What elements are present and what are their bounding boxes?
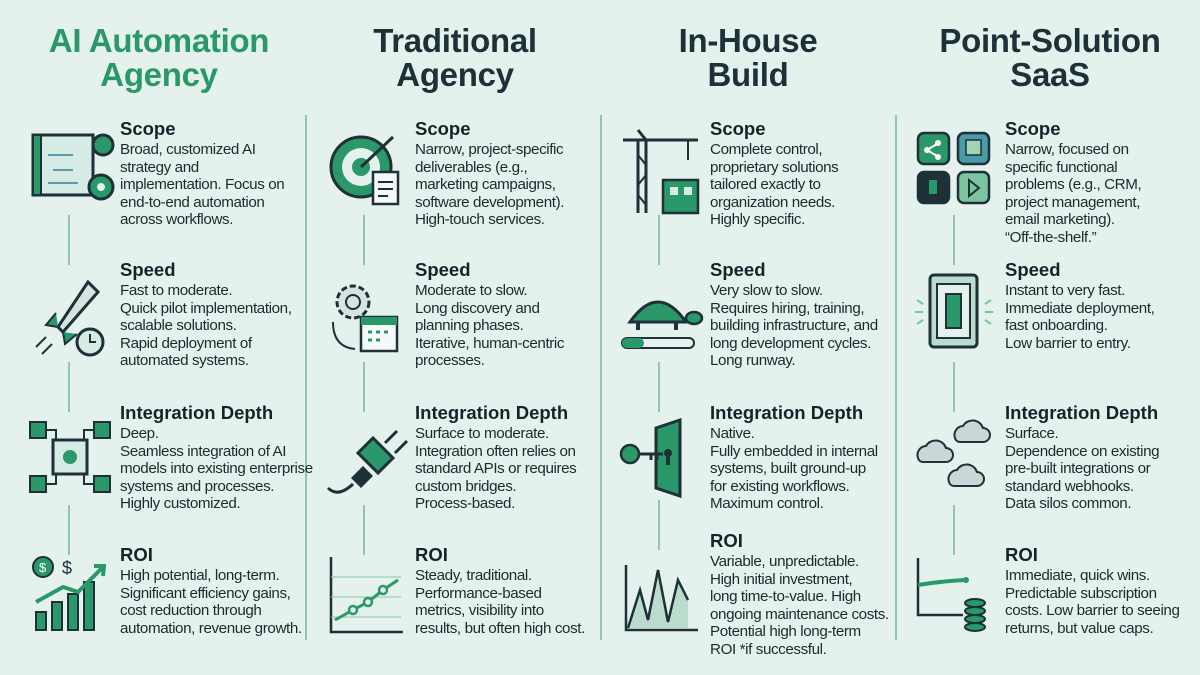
icon: blueprint with gears	[32, 134, 114, 200]
text: In-house integration: Maximum control.	[710, 495, 823, 512]
text: SaaS scope	[1005, 118, 1141, 246]
text: Traditional ROI: metrics, visibility into	[415, 602, 544, 619]
text: SaaS speed	[1005, 259, 1154, 352]
text: Traditional scope: software development).	[415, 194, 564, 210]
text: SaaS speed: Low barrier to entry.	[1005, 334, 1131, 352]
text: In-house speed: Very slow to slow.	[710, 282, 823, 299]
text: Traditional ROI: Steady, traditional.	[415, 567, 532, 584]
text: AI scope: Scope	[120, 118, 176, 139]
text: AI integration: Deep.	[120, 425, 159, 442]
text: Traditional scope: Scope	[415, 118, 471, 139]
icon: volatile chart	[624, 565, 698, 632]
text: Traditional scope: deliverables (e.g.,	[415, 158, 527, 176]
title: In-House Build	[679, 22, 817, 93]
text: AI scope: implementation. Focus on	[120, 176, 284, 193]
text: In-house scope: Complete control,	[710, 141, 822, 158]
text: SaaS speed: Speed	[1005, 259, 1061, 280]
text: Traditional speed: Long discovery and	[415, 300, 540, 316]
text: SaaS speed: Immediate deployment,	[1005, 300, 1154, 316]
text: In-house speed: building infrastructure, and	[710, 317, 878, 334]
text: Traditional scope	[415, 118, 564, 228]
text: Traditional scope: marketing campaigns,	[415, 176, 556, 193]
text: Traditional speed	[415, 259, 564, 369]
text: SaaS scope: email marketing).	[1005, 211, 1115, 228]
text: AI scope: across workflows.	[120, 211, 233, 228]
title: Traditional Agency: Agency	[396, 56, 514, 93]
text: SaaS ROI: returns, but value caps.	[1005, 620, 1153, 636]
text: SaaS scope: specific functional	[1005, 158, 1117, 176]
text: AI speed: automated systems.	[120, 352, 249, 369]
text: AI speed: Fast to moderate.	[120, 282, 232, 299]
icon: target with document	[330, 136, 400, 206]
text: In-house integration: Integration Depth	[710, 402, 863, 423]
text: In-house ROI	[710, 530, 889, 658]
icon: turtle with progress bar	[621, 300, 704, 349]
text: SaaS scope: Scope	[1005, 118, 1061, 139]
text: AI scope: Broad, customized AI	[120, 141, 256, 158]
text: In-house scope: organization needs.	[710, 194, 835, 210]
icon: growth chart with coins: $	[62, 558, 72, 578]
text: Traditional integration: Surface to moderate.	[415, 425, 549, 442]
text: Traditional scope: High-touch services.	[415, 211, 545, 228]
icon: flat line with coins	[916, 558, 986, 632]
text: AI ROI: cost reduction through	[120, 602, 261, 619]
text: AI scope: end-to-end automation	[120, 194, 264, 210]
text: AI speed: Rapid deployment of	[120, 334, 252, 352]
text: In-house ROI: ROI	[710, 530, 743, 551]
text: SaaS scope: Narrow, focused on	[1005, 141, 1129, 158]
text: SaaS integration: pre-built integrations or	[1005, 460, 1150, 477]
text: SaaS speed: fast onboarding.	[1005, 317, 1108, 334]
text: In-house integration: Native.	[710, 425, 754, 442]
text: In-house scope: tailored exactly to	[710, 176, 821, 193]
text: SaaS integration: standard webhooks.	[1005, 478, 1134, 494]
text: SaaS ROI: ROI	[1005, 544, 1038, 565]
title: In-House Build: In-House	[679, 22, 817, 59]
text: In-house ROI: ROI *if successful.	[710, 640, 826, 658]
text: AI ROI: automation, revenue growth.	[120, 620, 302, 636]
text: In-house scope: Scope	[710, 118, 766, 139]
text: AI speed: Speed	[120, 259, 176, 280]
title: Point-Solution SaaS: SaaS	[1010, 56, 1090, 93]
text: SaaS speed: Instant to very fast.	[1005, 282, 1125, 299]
text: SaaS scope: project management,	[1005, 194, 1140, 210]
text: In-house speed	[710, 259, 878, 369]
text: Traditional ROI: results, but often high cost.	[415, 620, 585, 636]
icon: growth chart with coins	[32, 556, 106, 631]
title: AI Automation Agency	[49, 22, 269, 93]
title: In-House Build: Build	[708, 56, 788, 93]
text: AI integration: systems and processes.	[120, 478, 274, 494]
text: In-house ROI: High initial investment,	[710, 570, 852, 588]
text: AI ROI: High potential, long-term.	[120, 567, 279, 584]
text: SaaS scope: problems (e.g., CRM,	[1005, 176, 1141, 193]
text: Traditional speed: Speed	[415, 259, 471, 280]
text: In-house speed: Speed	[710, 259, 766, 280]
icon: gear with calendar	[332, 284, 398, 352]
text: SaaS integration: Integration Depth	[1005, 402, 1158, 423]
title: AI Automation Agency: AI Automation	[49, 22, 269, 59]
icon: growth chart with coins: $	[39, 560, 47, 575]
text: Traditional speed: planning phases.	[415, 317, 523, 334]
text: In-house ROI: Potential high long-term	[710, 623, 861, 640]
text: SaaS integration	[1005, 402, 1159, 512]
text: Traditional integration: Integration Depth	[415, 402, 568, 423]
title: Point-Solution SaaS: Point-Solution	[939, 22, 1161, 59]
text: SaaS scope: “Off-the-shelf.”	[1005, 228, 1096, 246]
title: Traditional Agency: Traditional	[373, 22, 537, 59]
text: SaaS ROI: costs. Low barrier to seeing	[1005, 602, 1180, 619]
text: Traditional scope: Narrow, project-specific	[415, 141, 563, 158]
text: AI scope	[120, 118, 284, 228]
icon: steady line chart	[330, 557, 403, 634]
text: AI integration	[120, 402, 313, 512]
text: In-house integration: for existing workflows.	[710, 478, 849, 494]
text: AI integration: Seamless integration of AI	[120, 442, 286, 460]
icon: plug	[327, 430, 408, 494]
text: AI speed: scalable solutions.	[120, 317, 237, 334]
text: SaaS integration: Dependence on existing	[1005, 442, 1159, 460]
text: Traditional speed: Moderate to slow.	[415, 282, 527, 299]
icon: crane with building	[623, 129, 700, 214]
text: In-house scope: Highly specific.	[710, 211, 805, 228]
text: In-house integration: systems, built ground-up	[710, 460, 866, 477]
text: AI ROI	[120, 544, 302, 636]
icon: chip	[29, 421, 111, 493]
text: In-house ROI: Variable, unpredictable.	[710, 553, 859, 570]
text: AI ROI: ROI	[120, 544, 153, 565]
text: SaaS integration: Data silos common.	[1005, 495, 1131, 512]
text: In-house ROI: ongoing maintenance costs.	[710, 606, 889, 622]
text: AI integration: Integration Depth	[120, 402, 273, 423]
text: AI ROI: Significant efficiency gains,	[120, 584, 290, 602]
icon: switch	[915, 274, 993, 348]
text: Traditional integration: Integration often relies on	[415, 442, 576, 460]
text: SaaS ROI: Immediate, quick wins.	[1005, 567, 1150, 584]
text: In-house scope: proprietary solutions	[710, 158, 838, 176]
text: Traditional ROI: Performance-based	[415, 584, 542, 602]
text: In-house scope	[710, 118, 838, 228]
text: In-house speed: Requires hiring, training,	[710, 300, 864, 316]
text: Traditional ROI: ROI	[415, 544, 448, 565]
text: Traditional speed: Iterative, human-centric	[415, 334, 564, 352]
text: AI integration: models into existing enterprise	[120, 460, 313, 477]
title: Point-Solution SaaS	[939, 22, 1161, 93]
text: AI integration: Highly customized.	[120, 495, 240, 512]
text: SaaS ROI: Predictable subscription	[1005, 584, 1157, 602]
icon: app tiles	[916, 132, 990, 204]
text: SaaS ROI	[1005, 544, 1180, 636]
text: In-house integration: Fully embedded in internal	[710, 442, 878, 460]
text: In-house speed: Long runway.	[710, 352, 795, 369]
text: Traditional integration: Process-based.	[415, 495, 515, 512]
text: In-house ROI: long time-to-value. High	[710, 588, 861, 605]
title: AI Automation Agency: Agency	[100, 56, 218, 93]
text: AI speed	[120, 259, 292, 369]
text: Traditional ROI	[415, 544, 585, 636]
text: Traditional integration	[415, 402, 576, 512]
text: SaaS integration: Surface.	[1005, 425, 1058, 442]
text: Traditional integration: custom bridges.	[415, 478, 516, 494]
text: In-house speed: long development cycles.	[710, 334, 871, 352]
text: AI scope: strategy and	[120, 158, 199, 176]
icon: key and door	[620, 418, 682, 498]
title: Traditional Agency	[373, 22, 537, 93]
text: Traditional speed: processes.	[415, 352, 484, 369]
text: In-house integration	[710, 402, 878, 512]
icon: clouds	[916, 420, 991, 487]
text: Traditional integration: standard APIs or requires	[415, 460, 576, 477]
text: AI speed: Quick pilot implementation,	[120, 300, 292, 316]
icon: rocket with clock	[35, 280, 104, 356]
